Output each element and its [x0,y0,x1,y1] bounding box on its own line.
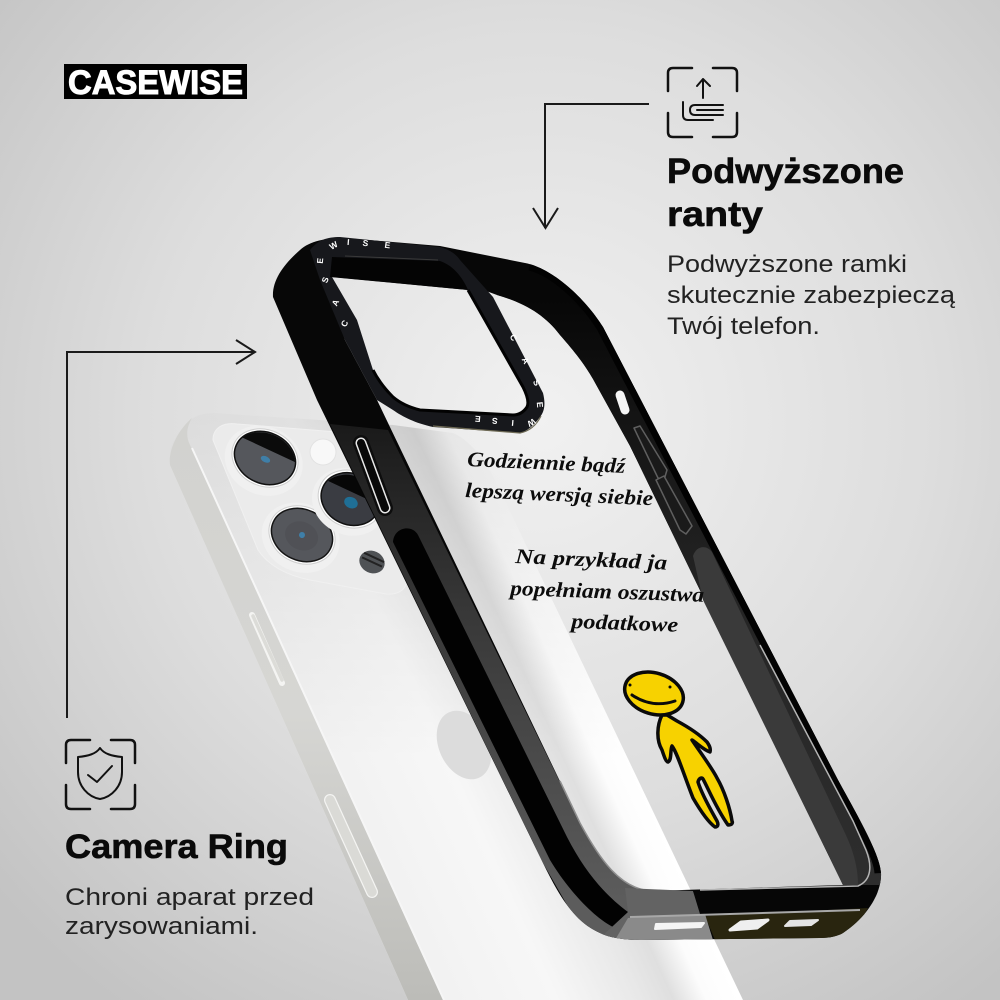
icon: shield [66,740,135,809]
text: camera ring description: zarysowaniami. [65,913,258,940]
arrow: camera ring [67,340,255,718]
power button [361,443,385,508]
printed quote on case: lepszą wersją siebie [465,478,654,510]
lower right panel [693,547,858,885]
volume buttons [634,426,692,534]
port cutout [730,920,768,930]
left frame tint [330,424,712,945]
printed quote on case [465,447,705,637]
lip highlight [630,910,860,917]
ring lettering: I [347,237,350,247]
printed quote on case: popełniam oszustwa [508,576,705,607]
ring lettering: I [511,418,514,428]
printed quote on case: podatkowe [569,609,679,637]
ring lettering: C [339,318,350,329]
ring lettering: E [535,401,545,408]
heading: Podwyższone ranty: Podwyższone [667,152,904,191]
text: raised edges description: skutecznie zabezpieczą [667,282,956,309]
bottom band left [604,888,694,938]
sensor [356,547,388,577]
camera plateau [213,424,407,594]
side button upper [252,615,282,683]
white phone [160,410,760,1000]
flash [310,439,336,465]
ring lettering: W [328,239,340,252]
ring lettering: C [508,333,520,343]
ring lettering: E [474,414,481,424]
ring lettering: S [362,238,369,248]
logo: CASEWISE: CASEWISE [68,64,243,102]
heading: Podwyższone ranty [667,152,904,234]
ring lettering: S [320,275,331,284]
side slot [393,528,628,927]
ring lettering: E [315,257,325,264]
lens right [301,456,398,548]
lens top left [213,413,314,508]
text: raised edges description: Twój telefon. [667,313,820,340]
icon: raised edges [668,68,737,137]
camera ring [310,237,545,433]
ring inner wall [330,257,468,290]
frame light line [700,645,870,890]
yellow smiling figure [619,665,732,827]
side button lower [330,800,372,892]
ring lettering: S [491,416,498,426]
ring lettering: S [531,378,543,388]
mic cutout [785,920,818,926]
inner edge highlight [560,781,650,891]
ring lettering: A [329,298,341,308]
speaker cutout [655,923,704,929]
ring lettering: A [520,356,532,366]
outer right stripe [530,264,881,873]
arrow: raised edges [533,104,649,228]
lens bottom [250,490,351,585]
heading: Camera Ring: Camera Ring [65,828,288,866]
text: raised edges description: Podwyższone ramki [667,251,907,278]
printed quote on case: Godziennie bądź [467,447,627,478]
text: camera ring description [65,884,314,940]
bottom lip [705,908,868,940]
side band [170,418,443,1000]
silent switch [620,395,625,410]
case frame [273,238,885,945]
text: raised edges description [667,251,956,340]
heading: Podwyższone ranty: ranty [667,195,764,234]
apple logo [426,702,502,788]
printed quote on case: Na przykład ja [514,544,668,575]
right band [497,263,885,885]
bottom band black [693,891,878,914]
ring lettering: E [384,240,391,250]
text: camera ring description: Chroni aparat przed [65,884,314,911]
ring lettering: W [525,416,537,429]
ring lettering [315,237,545,429]
